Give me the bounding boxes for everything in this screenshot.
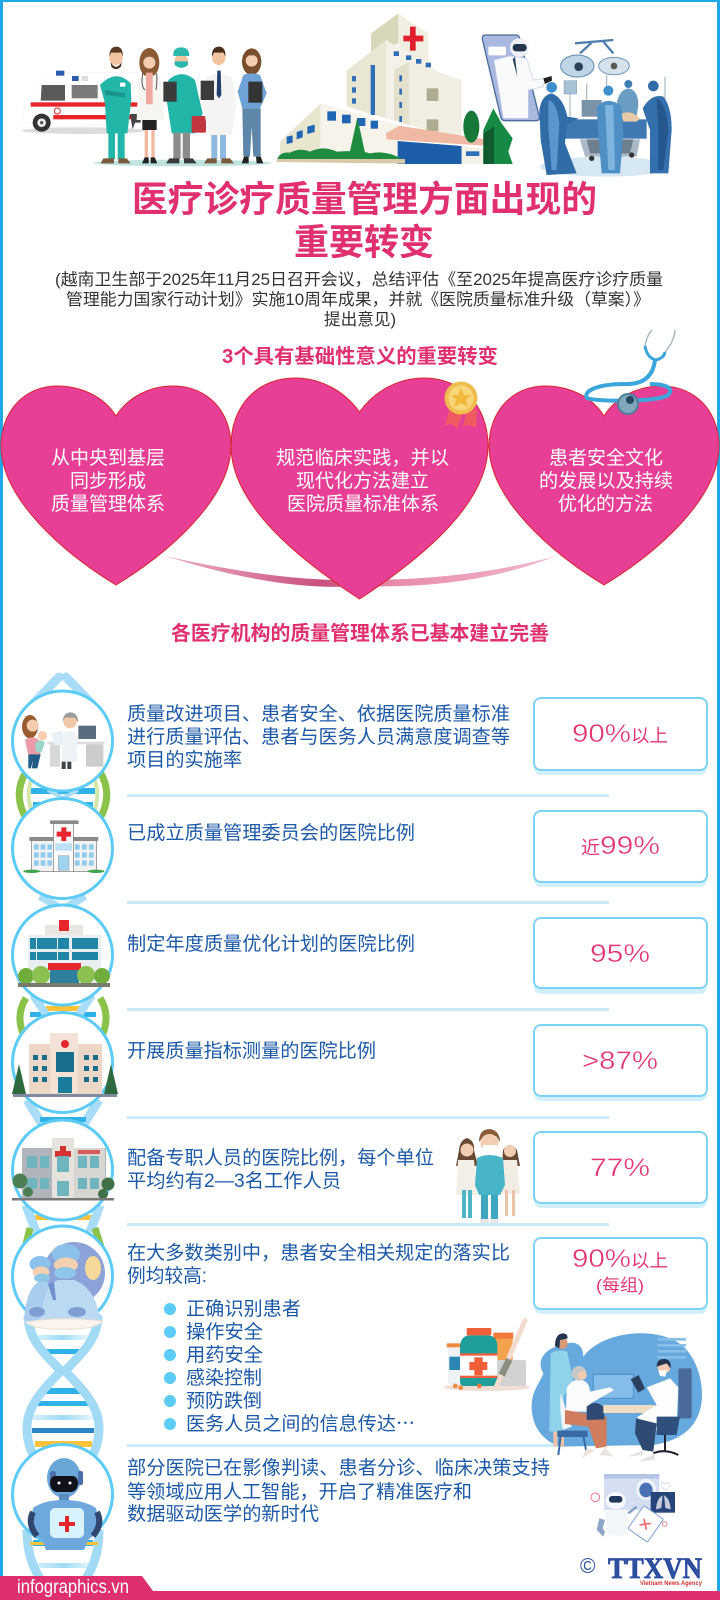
circle icon: robot <box>12 1444 112 1550</box>
panel: heart 3: 优化的方法 <box>558 493 653 515</box>
row 1 value box <box>534 698 707 775</box>
ambulance <box>22 71 145 134</box>
panel: heart 3: 的发展以及持续 <box>539 470 673 492</box>
subtitle text <box>55 270 663 329</box>
AI doctor in phone <box>482 35 552 121</box>
hospital <box>277 13 513 164</box>
row 1 text: 进行质量评估、患者与医务人员满意度调查等 <box>127 726 510 748</box>
row 5 text: 平均约有2—3名工作人员 <box>127 1170 341 1192</box>
circle icon: hospital 3 <box>12 1012 118 1112</box>
logo: TTXVN: © <box>580 1555 596 1578</box>
icon: medal <box>444 382 478 429</box>
row 6 value box: 90% <box>572 1245 631 1273</box>
circle icon: surgeons <box>12 1226 112 1329</box>
illustration: medicine and thermometer <box>443 1321 530 1391</box>
row 3 text: 制定年度质量优化计划的医院比例 <box>127 933 415 955</box>
panel: heart 2 <box>231 378 488 599</box>
row 5 value box <box>534 1132 707 1208</box>
row 6 text <box>127 1242 510 1287</box>
row 7 text: 部分医院已在影像判读、患者分诊、临床决策支持 <box>127 1457 550 1479</box>
heading: quality management system: 各医疗机构的质量管理体系已基本建立完善 <box>171 621 549 645</box>
panel: heart 2: 规范临床实践，并以 <box>276 447 449 469</box>
row 5 text: 配备专职人员的医院比例，每个单位 <box>127 1147 434 1169</box>
row 3 value box <box>534 918 707 994</box>
title <box>132 178 597 262</box>
row 1 text: 质量改进项目、患者安全、依据医院质量标准 <box>127 703 510 725</box>
panel: heart 3 <box>489 386 719 585</box>
subtitle text: 管理能力国家行动计划》实施10周年成果，并就《医院质量标准升级（草案）》 <box>66 290 650 309</box>
panel: heart 1 <box>1 386 231 585</box>
row 6 text: 例均较高: <box>127 1265 207 1287</box>
doctor 4 <box>201 47 237 163</box>
illustration: AI robot with medical imaging <box>591 1474 675 1542</box>
footer bar: infographics.vn <box>17 1576 129 1598</box>
panel: heart 2: 医院质量标准体系 <box>287 493 439 515</box>
row 5 text <box>127 1147 434 1192</box>
footer bar <box>0 1576 720 1600</box>
bullet list: 预防跌倒 <box>186 1390 262 1412</box>
circle icon: mother with doctor <box>12 691 112 791</box>
bullet list: 正确识别患者 <box>186 1298 301 1320</box>
illustration: ambulance and medical staff <box>22 47 272 166</box>
bullet list: 医务人员之间的信息传达⋯ <box>186 1413 415 1435</box>
logo: TTXVN: TTXVN <box>608 1552 702 1585</box>
icon: stethoscope <box>586 330 675 414</box>
title: 重要转变 <box>294 222 434 262</box>
panel: heart 3: 患者安全文化 <box>549 447 663 469</box>
row 6 text: 在大多数类别中，患者安全相关规定的落实比 <box>127 1242 510 1264</box>
bullet list: 感染控制 <box>186 1367 262 1389</box>
logo: TTXVN <box>580 1552 702 1587</box>
row 6 value box <box>534 1238 707 1314</box>
row 4 value box: >87% <box>582 1047 658 1075</box>
illustration: hospital building, AI doctor phone and surgical team <box>277 13 672 177</box>
row 1 value box: 以上 <box>631 726 668 746</box>
row 4 text: 开展质量指标测量的医院比例 <box>127 1040 376 1062</box>
row 1 text <box>127 703 510 771</box>
bullet list: 用药安全 <box>186 1344 263 1366</box>
doctor 1 <box>100 47 131 163</box>
row 7 text: 等领域应用人工智能，开启了精准医疗和 <box>127 1481 472 1503</box>
illustration: three medical staff <box>456 1129 520 1223</box>
bullet list <box>164 1298 415 1435</box>
row 6 value box: (每组) <box>596 1276 644 1295</box>
panel: heart 1: 质量管理体系 <box>51 493 165 515</box>
bullet list: 操作安全 <box>186 1321 263 1343</box>
row 1 text: 项目的实施率 <box>127 749 242 771</box>
logo: TTXVN: Vietnam News Agency <box>640 1580 702 1587</box>
panel: heart 1: 从中央到基层 <box>51 447 165 469</box>
row 7 text: 数据驱动医学的新时代 <box>127 1503 319 1525</box>
panel: heart 1: 同步形成 <box>70 470 146 492</box>
row 3 value box: 95% <box>590 940 650 968</box>
row 7 text <box>127 1457 550 1525</box>
subtitle text: 提出意见) <box>324 310 396 329</box>
circle icon: hospital 1 <box>12 798 112 898</box>
subtitle text: (越南卫生部于2025年11月25日召开会议，总结评估《至2025年提高医疗诊疗质量 <box>55 270 663 289</box>
row 5 value box: 77% <box>590 1154 650 1182</box>
circle icon: hospital 2 <box>12 905 112 1005</box>
illustration: doctor consulting patient <box>532 1333 702 1462</box>
row 6 value box: 以上 <box>631 1251 668 1271</box>
row 1 value box: 90% <box>572 720 631 748</box>
row 2 value box: 近 <box>581 838 600 858</box>
floor shadow <box>93 160 272 166</box>
row 2 value box <box>534 811 707 887</box>
connecting arc behind hearts <box>165 556 556 587</box>
panel: heart 2: 现代化方法建立 <box>296 470 429 492</box>
heading: three transformations: 3个具有基础性意义的重要转变 <box>222 344 498 368</box>
row 4 value box <box>534 1025 707 1101</box>
DNA helix backdrop <box>19 677 107 1582</box>
row 2 value box: 99% <box>600 832 660 860</box>
doctor 2 <box>137 48 164 163</box>
row 2 text: 已成立质量管理委员会的医院比例 <box>127 822 415 844</box>
title: 医疗诊疗质量管理方面出现的 <box>132 178 597 220</box>
circle icon: hospital 4 <box>12 1120 114 1220</box>
doctor 3 <box>163 47 206 163</box>
doctor 5 <box>238 48 267 163</box>
surgical team <box>539 40 672 177</box>
